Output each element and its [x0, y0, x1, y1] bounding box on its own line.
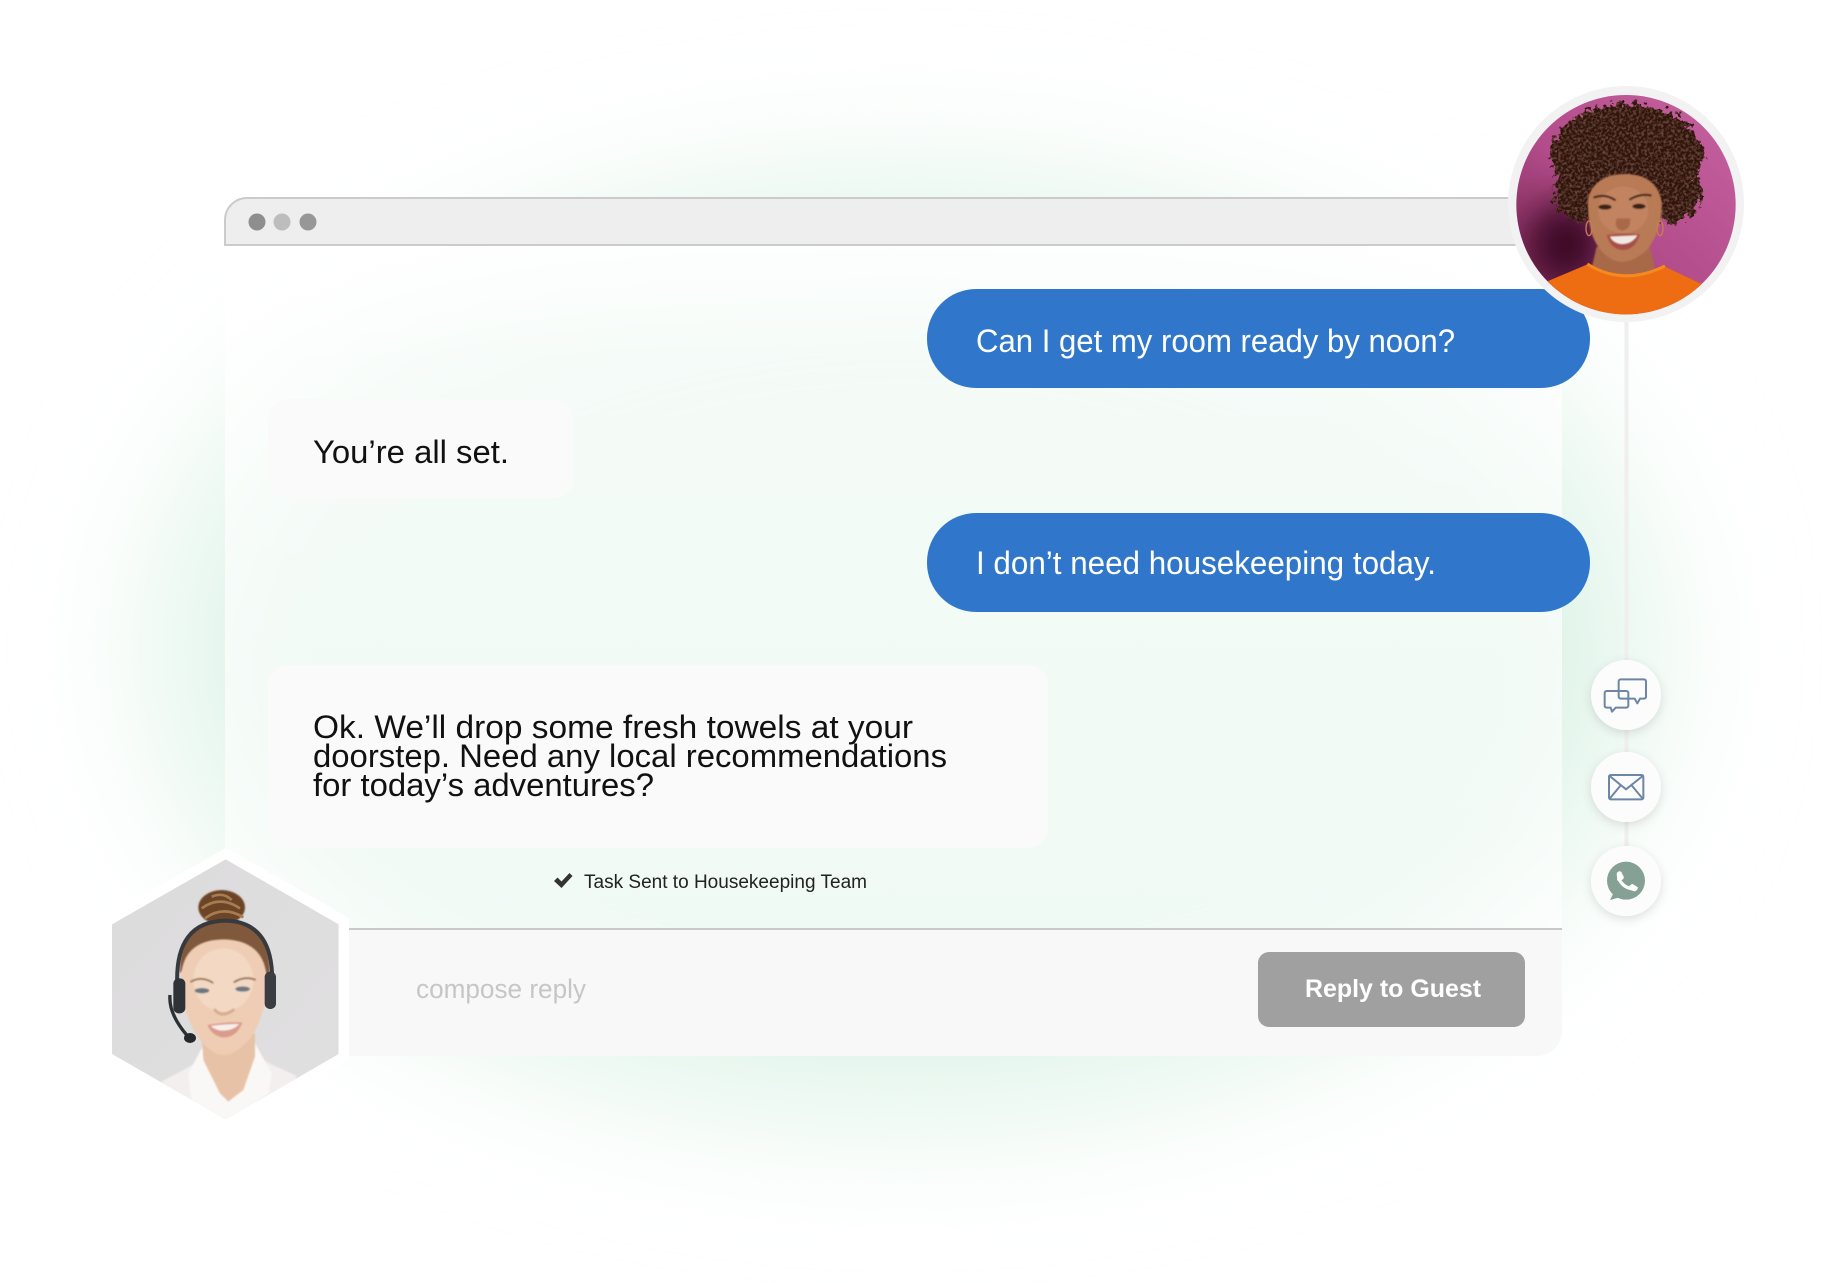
background green glow — [170, 193, 1640, 1103]
earrings — [1586, 221, 1592, 236]
window body — [225, 246, 1562, 936]
portrait ring — [1508, 86, 1744, 322]
shirt — [1548, 264, 1702, 314]
face — [1588, 174, 1662, 262]
nose — [1616, 218, 1630, 231]
guest message: housekeeping — [927, 513, 1590, 612]
mouth — [1607, 234, 1640, 250]
chat window — [225, 198, 1590, 1056]
portrait photo — [1513, 93, 1740, 323]
icon: email envelope — [1591, 752, 1661, 822]
guest message: housekeeping: I don’t need housekeeping today. — [976, 545, 1436, 581]
guest message: room ready — [927, 289, 1590, 388]
face — [181, 939, 267, 1055]
reply button: Reply to Guest — [1305, 975, 1482, 1003]
icon: chat bubbles — [1591, 660, 1661, 730]
agent message: all set — [268, 399, 574, 498]
reply bar: compose reply — [416, 974, 586, 1004]
reply button — [1258, 952, 1525, 1027]
window title bar — [225, 198, 1530, 245]
neck — [202, 1033, 255, 1102]
agent portrait — [102, 848, 349, 1131]
nose — [215, 1010, 233, 1014]
icon: whatsapp — [1591, 846, 1661, 916]
agent photo — [110, 857, 343, 1123]
guest portrait — [1508, 86, 1744, 323]
mouth — [207, 1022, 242, 1037]
brows and eyes — [1594, 195, 1651, 200]
agent message: towels — [268, 665, 1048, 848]
guest message: room ready: Can I get my room ready by noon? — [976, 323, 1455, 359]
hair bun — [198, 890, 245, 925]
agent message: all set: You’re all set. — [313, 434, 509, 470]
headset — [177, 921, 272, 987]
agent message: towels: doorstep. Need any local recommendations — [313, 738, 947, 774]
hexagon frame — [102, 848, 349, 1131]
hair — [1546, 99, 1708, 184]
head hair — [180, 922, 270, 974]
neck — [1592, 247, 1655, 276]
agent message: towels: for today’s adventures? — [313, 767, 654, 803]
brows and eyes — [191, 978, 255, 983]
agent message: towels: Ok. We’ll drop some fresh towels at your — [313, 709, 913, 745]
shirt — [162, 1062, 296, 1100]
task status: Task Sent to Housekeeping Team — [584, 872, 867, 893]
reply bar — [349, 928, 1562, 1056]
channel connector line — [1624, 300, 1628, 890]
